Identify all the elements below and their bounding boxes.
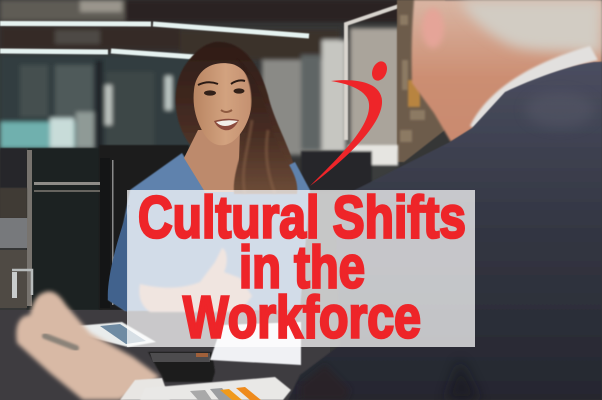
logo: head dot bbox=[369, 59, 390, 83]
title bbox=[138, 184, 466, 350]
shirt cuff bbox=[120, 378, 170, 400]
hair bbox=[176, 42, 298, 196]
title panel bbox=[127, 190, 475, 347]
left hand bbox=[16, 291, 160, 400]
hair front bbox=[234, 58, 297, 194]
report sheet bbox=[140, 377, 291, 400]
neck bbox=[184, 130, 240, 192]
man in foreground bbox=[288, 0, 602, 400]
tablet bbox=[52, 322, 156, 347]
face bbox=[194, 63, 252, 145]
logo: swoosh body bbox=[310, 80, 382, 186]
collar bbox=[470, 46, 598, 130]
sleeve bbox=[108, 205, 130, 312]
table bbox=[0, 310, 330, 400]
logo bbox=[310, 59, 390, 186]
suit bbox=[288, 62, 602, 400]
torso bbox=[108, 153, 310, 311]
forearm and gesturing hands bbox=[139, 248, 252, 312]
pen bbox=[45, 336, 76, 348]
desk items bbox=[16, 291, 301, 400]
grey hair bbox=[460, 0, 602, 55]
ceiling lights bbox=[0, 6, 399, 140]
calculator bbox=[148, 352, 215, 382]
ear bbox=[422, 8, 444, 48]
chairs bbox=[0, 145, 189, 310]
title line 3: Workforce bbox=[183, 284, 421, 350]
background monitors bbox=[301, 145, 398, 191]
title line 1: Cultural Shifts bbox=[138, 184, 466, 250]
notepad bbox=[210, 322, 301, 365]
stone column bbox=[397, 0, 445, 162]
title line 2: in the bbox=[239, 234, 365, 300]
head bbox=[412, 0, 602, 142]
woman bbox=[108, 42, 310, 312]
facial features bbox=[198, 80, 245, 130]
